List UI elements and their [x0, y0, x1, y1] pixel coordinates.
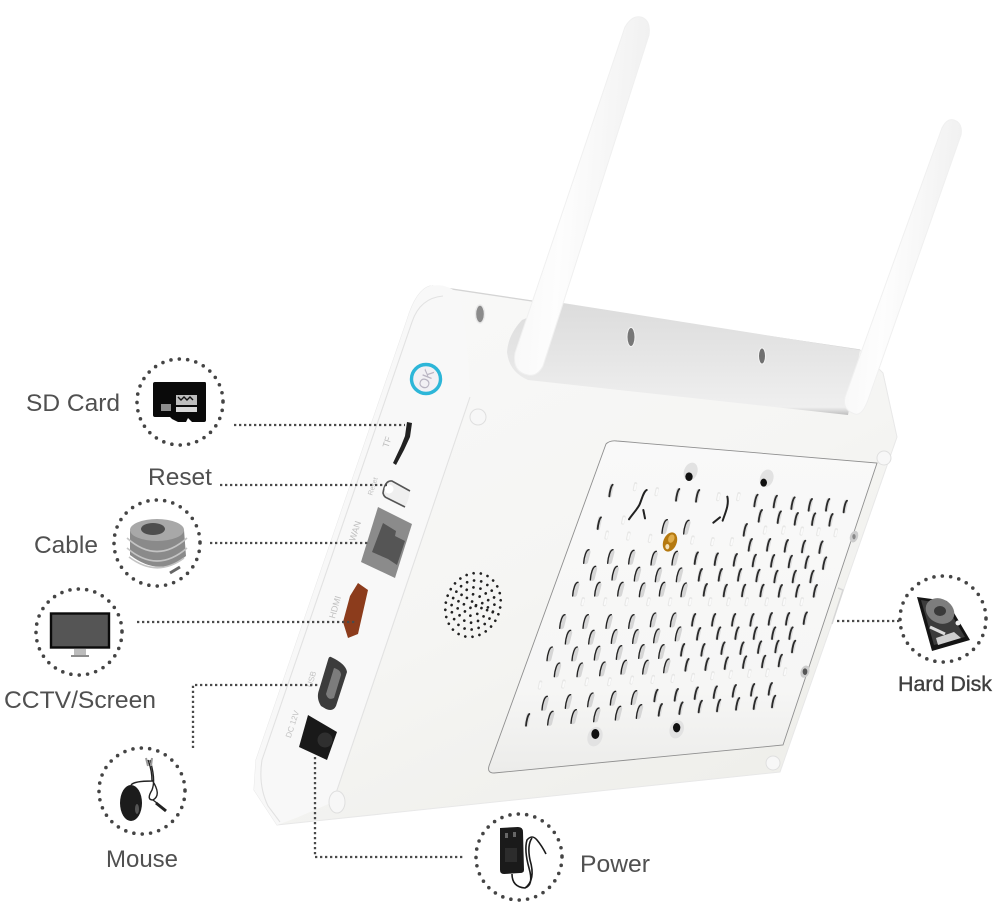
gold connector: [660, 530, 680, 554]
circle: SD Card: [137, 359, 223, 445]
antenna recess: [507, 303, 860, 415]
label: Mouse: Mouse: [106, 846, 178, 873]
connector: Hard Disk: [837, 620, 900, 622]
connector: CCTV/Screen: [137, 621, 355, 623]
vent slots: [524, 461, 860, 749]
label: Hard Disk: Hard Disk: [898, 673, 993, 696]
DC power port: [284, 709, 337, 760]
corner bumps: [329, 409, 891, 813]
HDMI port: HDMI: [327, 595, 343, 620]
label: Power: Power: [580, 851, 650, 878]
reset button: [367, 477, 410, 507]
dotted circles: [36, 359, 986, 900]
circle: Screen: [36, 589, 122, 675]
circle: Power: [476, 814, 562, 900]
reset button: Reset: [367, 477, 380, 496]
power button OK: OK: [415, 366, 437, 391]
left antenna: [515, 17, 649, 375]
rear plate: [489, 441, 877, 773]
USB port: USB: [305, 670, 318, 688]
WAN port: [347, 507, 412, 578]
HDMI port: [327, 583, 368, 638]
top screw holes: [476, 305, 766, 364]
connector: Reset: [220, 484, 387, 486]
TF card slot: TF: [381, 435, 394, 449]
label: SD Card: SD Card: [26, 390, 120, 417]
back panel: [254, 286, 897, 825]
connector: Mouse: [193, 685, 320, 748]
device body: [254, 17, 961, 825]
USB port: [305, 657, 347, 710]
side strip edge lines: [261, 296, 470, 822]
connector: SD Card: [234, 424, 405, 426]
speaker grille: [437, 565, 509, 645]
circle: Mouse: [99, 748, 185, 834]
DC power port: DC 12V: [284, 709, 301, 739]
icon: mouse: [120, 758, 166, 821]
label: Cable: Cable: [34, 532, 98, 559]
icon: hard disk: [917, 593, 970, 651]
WAN port: WAN: [347, 520, 363, 542]
icon: monitor: [51, 614, 109, 657]
power button OK: [412, 364, 440, 394]
dotted connector lines: [137, 425, 900, 857]
screw holes: [585, 461, 860, 749]
TF card slot: [381, 422, 412, 465]
right antenna: [844, 120, 961, 414]
icon: cable coil: [127, 519, 187, 573]
label: CCTV/Screen: CCTV/Screen: [4, 687, 156, 714]
keyhole slots: [629, 490, 647, 519]
icon: SD card: [153, 382, 206, 422]
connector: Cable: [210, 542, 368, 544]
circle: Cable: [114, 500, 200, 586]
labels: [4, 390, 993, 878]
top edge highlight: [432, 286, 860, 350]
circle: Hard Disk: [900, 576, 986, 662]
side strip: [254, 285, 470, 825]
hard disk bay bump: [832, 588, 843, 624]
connector: Power: [315, 757, 463, 857]
icon: power adapter: [500, 827, 546, 888]
label: Reset: Reset: [148, 464, 212, 491]
